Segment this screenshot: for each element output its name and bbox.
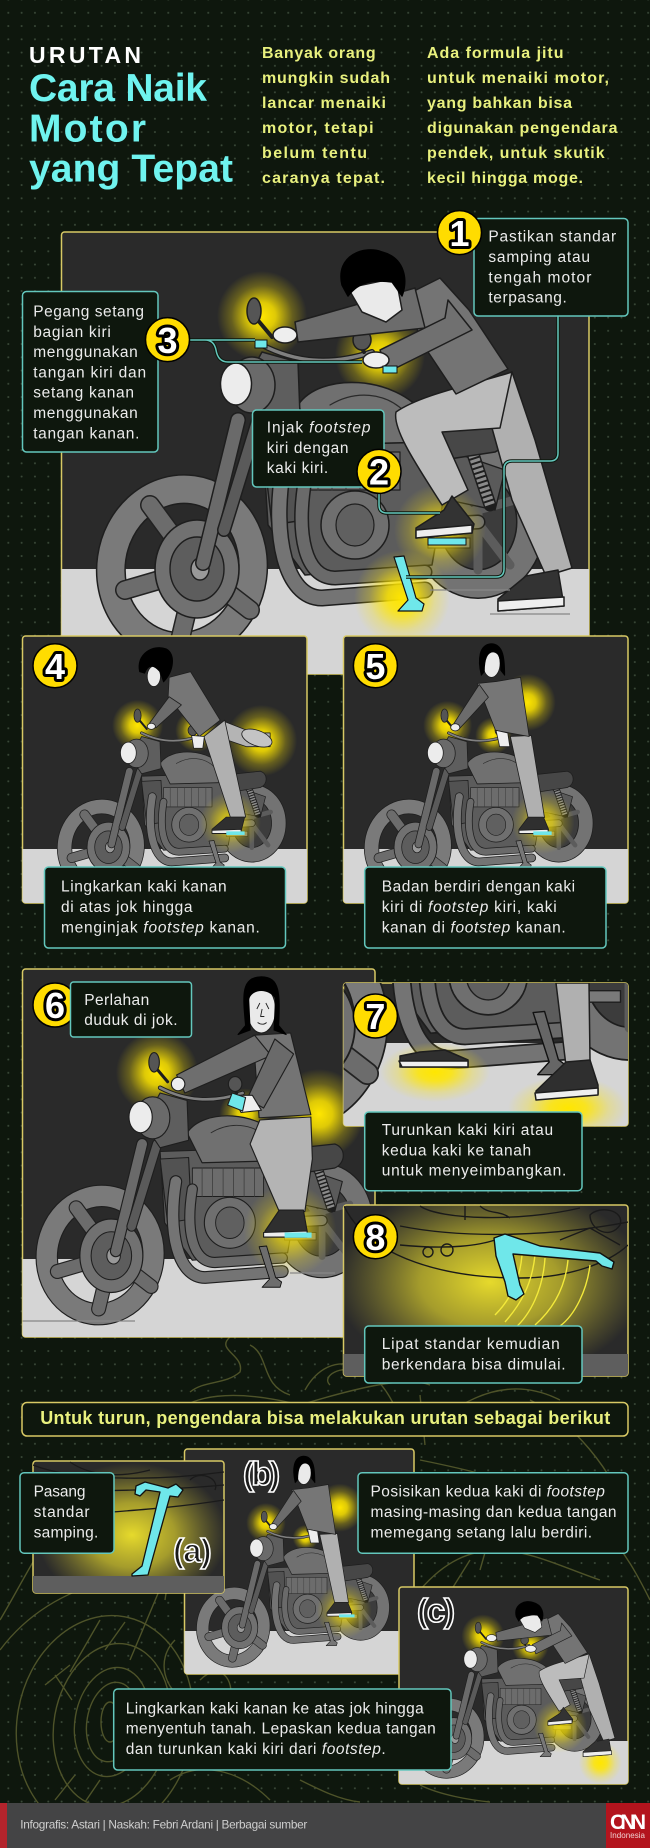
banner: dismount heading: Untuk turun, pengendara bisa melakukan urutan sebagai berikut xyxy=(40,1408,610,1428)
arrow: connector from step 2 to footstep xyxy=(379,490,440,513)
callout: step 3: Pegang setang xyxy=(33,304,144,320)
illustration: rider mounting xyxy=(273,250,572,611)
callout: step 3 xyxy=(22,292,190,452)
caption: step c: dan turunkan kaki kiri dari footstep. xyxy=(126,1741,386,1758)
credits: Infografis: Astari | Naskah: Febri Ardani | Berbagai sumber xyxy=(20,1817,307,1831)
caption: step a: Pasang xyxy=(34,1484,86,1501)
label (a): (a) xyxy=(173,1532,212,1569)
logo: CNN Indonesia: CNN xyxy=(610,1811,646,1834)
yellow glow xyxy=(45,1466,223,1576)
banner: dismount heading xyxy=(22,1402,628,1436)
arrow: connector line step 1 teal xyxy=(406,316,558,577)
title: Cara Naik Motor yang Tepat xyxy=(29,67,233,190)
caption: step 7: Turunkan kaki kiri atau xyxy=(382,1122,553,1139)
icon: folded side stand in cyan xyxy=(494,1234,614,1300)
caption: step 4: Lingkarkan kaki kanan xyxy=(61,879,227,896)
ground shadows xyxy=(430,590,570,614)
caption: step 8: Lipat standar kemudian xyxy=(382,1336,560,1353)
illustration: motorcycle with seated rider xyxy=(39,977,364,1321)
caption: step 7: kedua kaki ke tanah xyxy=(382,1142,531,1159)
intro text column 2: yang bahkan bisa xyxy=(427,95,572,112)
yellow glow xyxy=(344,1205,628,1354)
illustration: motorcycle with rider standing on footsteps xyxy=(366,644,586,892)
arrow: connector line step 3 teal xyxy=(190,340,362,362)
caption: step c: Lingkarkan kaki kanan ke atas jok hingga xyxy=(126,1700,424,1717)
caption: step b: memegang setang lalu berdiri. xyxy=(370,1524,592,1541)
caption: step 5: kiri di footstep kiri, kaki xyxy=(382,899,557,916)
caption: step 6: Perlahan xyxy=(84,992,149,1009)
step number 2: 2 xyxy=(369,452,389,493)
arrow: connector from step 1 to stand xyxy=(406,316,558,577)
caption: step b xyxy=(358,1473,628,1553)
line art: engine underside xyxy=(33,1462,224,1512)
intro text column 2 xyxy=(427,45,618,187)
panel: step c xyxy=(399,1587,628,1784)
illustration: motorcycle close-up with feet on the ground xyxy=(196,715,650,1127)
caption: step c: menyentuh tanah. Lepaskan kedua tangan xyxy=(126,1721,436,1738)
callout: step 2 xyxy=(252,410,401,493)
highlight glows on footstep and stand xyxy=(356,488,484,636)
step number 4 xyxy=(33,644,77,688)
callout: step 3: tangan kanan. xyxy=(33,425,139,442)
intro text column 1: Banyak orang xyxy=(262,45,376,62)
intro text column 1: mungkin sudah xyxy=(262,70,390,87)
panel: step 6 xyxy=(22,969,375,1337)
callout: step 3: tangan kiri dan xyxy=(33,364,146,381)
intro text column 1 xyxy=(262,45,390,187)
icon: side stand in cyan xyxy=(394,556,424,611)
label (c): (c) xyxy=(417,1592,455,1629)
intro text column 2: untuk menaiki motor, xyxy=(427,70,609,87)
step number 1 xyxy=(438,211,482,255)
step number 5 xyxy=(353,644,397,688)
step number 3: 3 xyxy=(157,320,178,361)
callout: step 3: setang kanan xyxy=(33,385,134,402)
label (b): (b) xyxy=(243,1455,280,1492)
title: Cara Naik Motor yang Tepat: yang Tepat xyxy=(29,148,233,190)
callout: step 1: tengah motor xyxy=(488,269,591,286)
panel: step b xyxy=(184,1449,414,1674)
step number 6 xyxy=(33,983,77,1027)
caption: step 4: menginjak footstep kanan. xyxy=(61,919,260,936)
intro text column 2: Ada formula jitu xyxy=(427,45,564,62)
caption: step a: samping. xyxy=(34,1524,98,1541)
highlight glows under feet xyxy=(382,1044,626,1126)
step number 7 xyxy=(353,994,397,1038)
glow behind handlebars xyxy=(217,271,425,400)
caption: step b: Posisikan kedua kaki di footstep xyxy=(370,1484,605,1501)
callout: step 2: kaki kiri. xyxy=(267,460,328,477)
callout: step 2: kiri dengan xyxy=(267,440,348,457)
callout: step 3: bagian kiri xyxy=(33,324,111,341)
step number 8 xyxy=(353,1215,397,1259)
illustration: motorcycle with rider swinging leg xyxy=(59,647,297,892)
step number 7: 7 xyxy=(365,996,385,1037)
caption: step 4: di atas jok hingga xyxy=(61,899,193,916)
caption: step 7: untuk menyeimbangkan. xyxy=(382,1163,566,1180)
intro text column 2: pendek, untuk skutik xyxy=(427,145,605,162)
intro text column 2: kecil hingga moge. xyxy=(427,170,583,187)
intro text column 1: lancar menaiki xyxy=(262,95,386,112)
caption: step 6: duduk di jok. xyxy=(84,1012,178,1029)
callout: step 1: Pastikan standar xyxy=(488,229,616,246)
title: Cara Naik Motor yang Tepat: Cara Naik xyxy=(29,67,207,110)
callout: step 1: terpasang. xyxy=(488,290,567,307)
title: Cara Naik Motor yang Tepat: Motor xyxy=(29,108,146,150)
step number 2 xyxy=(357,449,401,493)
icon: cyan grips and footstep xyxy=(255,340,466,545)
icon: side stand down in cyan xyxy=(132,1482,183,1576)
arrow: connector line step 2 teal xyxy=(379,490,440,513)
step number 5: 5 xyxy=(365,646,385,687)
caption: step 8: berkendara bisa dimulai. xyxy=(382,1356,566,1373)
step number 6: 6 xyxy=(45,985,65,1026)
title block xyxy=(29,42,233,190)
step number 8: 8 xyxy=(365,1217,385,1258)
callout: step 3: menggunakan xyxy=(33,405,138,422)
step number 1: 1 xyxy=(449,213,470,254)
callout: step 1 xyxy=(438,211,628,316)
caption: step 7 xyxy=(365,1112,582,1191)
caption: step c xyxy=(114,1689,451,1770)
motion lines of the stand folding xyxy=(495,1255,590,1328)
intro text column 1: motor, tetapi xyxy=(262,120,374,137)
callout: step 3: menggunakan xyxy=(33,344,138,361)
footer bar xyxy=(0,1803,650,1848)
caption: step 5: Badan berdiri dengan kaki xyxy=(382,879,575,896)
step number 4: 4 xyxy=(45,646,65,687)
callout: step 2: Injak footstep xyxy=(267,420,371,437)
caption: step b: masing-masing dan kedua tangan xyxy=(370,1504,616,1521)
illustration: motorcycle with rider standing xyxy=(198,1456,383,1665)
caption: step a: standar xyxy=(34,1504,90,1521)
step number 3 xyxy=(146,318,190,362)
panel: step 4 xyxy=(22,636,307,948)
panel: step 7 xyxy=(342,982,629,1192)
arrow: connector from step 3 to handlebars xyxy=(190,340,362,362)
caption: step 5 xyxy=(365,867,606,948)
caption: step 5: kanan di footstep kanan. xyxy=(382,919,566,936)
illustration: rider legs and shoes xyxy=(399,983,598,1100)
line art: engine and exhaust underside xyxy=(344,1206,628,1278)
title kicker: URUTAN: URUTAN xyxy=(29,42,141,68)
intro text column 2: digunakan pengendara xyxy=(427,120,618,137)
panel: step 8 xyxy=(342,1204,629,1384)
intro text column 1: belum tentu xyxy=(262,145,367,162)
panel: step 5 xyxy=(344,636,628,948)
caption: step 8 xyxy=(365,1326,582,1383)
illustration: motorcycle xyxy=(101,298,531,656)
illustration: motorcycle with rider dismounting xyxy=(412,1601,622,1784)
intro text column 1: caranya tepat. xyxy=(262,170,385,187)
panel: main illustration, steps 1 to 3 xyxy=(62,232,589,675)
logo: CNN Indonesia xyxy=(606,1803,650,1848)
watermark: motorcycle line art xyxy=(0,1337,650,1848)
caption: step 6 xyxy=(70,982,192,1037)
caption: step a xyxy=(20,1473,114,1553)
panel: step a xyxy=(33,1461,227,1607)
logo: CNN Indonesia: Indonesia xyxy=(610,1831,646,1840)
callout: step 1: samping atau xyxy=(488,249,590,266)
caption: step 4 xyxy=(44,867,286,948)
